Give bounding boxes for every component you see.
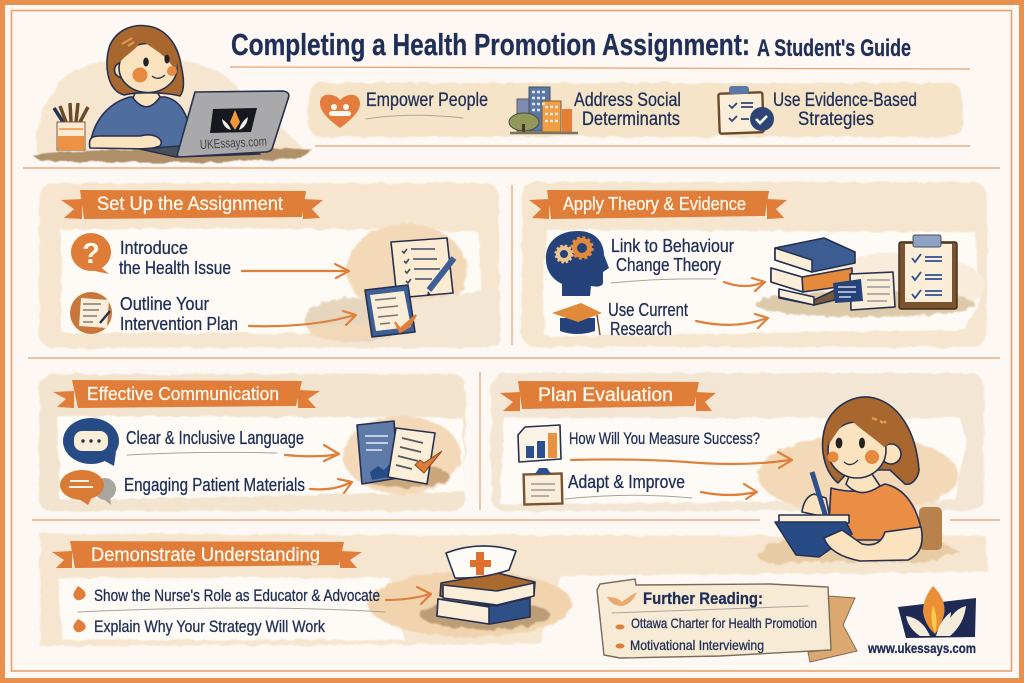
heading ribbon: Demonstrate Understanding: [91, 545, 320, 566]
illustration: student writing: [758, 397, 960, 563]
panel: key principles strip: [308, 83, 963, 137]
face: [828, 398, 901, 478]
reading list: Motivational Interviewing: [630, 637, 764, 653]
heading: Further Reading:: [643, 589, 763, 608]
arm and hand: [824, 527, 922, 561]
shirt: [828, 484, 921, 540]
arrow: [724, 278, 765, 291]
pen and hand: [802, 472, 830, 518]
text: Empower People: [366, 90, 488, 119]
arrow: [285, 445, 339, 461]
arrow: [701, 484, 757, 499]
arrow: [249, 311, 356, 326]
text: Introduce the Health Issue: the Health Issue: [119, 258, 231, 278]
text: Address Social Determinants: Determinants: [582, 109, 680, 130]
illustration: documents and check: [357, 421, 442, 484]
logo: UK Essays: www.ukessays.com: [867, 640, 976, 656]
text: Use Current Research: Research: [610, 319, 672, 339]
panel: Further Reading: [597, 579, 857, 662]
heading ribbon: Apply Theory & Evidence: [563, 194, 746, 214]
upper book: [440, 573, 535, 606]
bullet list: Show the Nurse's Role as Educator & Advocate: [94, 586, 380, 605]
text: Engaging Patient Materials: Engaging Patient Materials: [124, 475, 305, 495]
arrow: [310, 479, 352, 493]
arrow: [696, 314, 768, 328]
text: Outline Your Intervention Plan: Outline Your: [120, 294, 209, 314]
text: Use Evidence-Based Strategies: Use Evidence-Based: [773, 90, 917, 111]
illustration: books and nurse cap: [437, 546, 535, 624]
reading list: [616, 615, 817, 653]
text: Outline Your Intervention Plan: Intervention Plan: [120, 314, 238, 334]
pencil cup: [54, 103, 88, 150]
panel: Set Up the Assignment: [39, 183, 500, 348]
icon: clipboard: [524, 468, 562, 504]
icon: question bubble: [71, 233, 111, 274]
heading ribbon: [500, 381, 716, 411]
illustration: checklist, pen and clipboard: [365, 238, 454, 337]
header illustration: student at laptop: [32, 26, 312, 163]
student figure: [89, 26, 190, 149]
icon: graduation cap: [552, 303, 602, 335]
icon: bar chart: [518, 425, 561, 462]
icon: navy speech bubble: [63, 418, 119, 466]
text: Introduce the Health Issue: Introduce: [120, 238, 188, 258]
icon: question bubble: ?: [82, 238, 100, 270]
desk: [32, 148, 312, 163]
heading ribbon: [61, 190, 323, 219]
reading list: Ottawa Charter for Health Promotion: [631, 615, 817, 631]
ribbon tail: [808, 596, 857, 662]
panel: Plan Evaluation: [491, 373, 984, 515]
heading ribbon: [53, 380, 320, 408]
heading ribbon: Plan Evaluation: [538, 385, 673, 406]
arrow: [571, 452, 792, 468]
icon: heart with people: [320, 95, 360, 128]
text: Adapt & Improve: [565, 472, 692, 499]
research sheet: [850, 272, 895, 310]
lower book: [437, 598, 530, 624]
illustration backdrop: [368, 571, 572, 637]
text: Empower People: Empower People: [366, 90, 488, 111]
text: Link to Behaviour Change Theory: Change Theory: [616, 255, 721, 275]
illustration backdrop: [758, 435, 958, 515]
text: Use Current Research: Use Current: [608, 300, 688, 320]
arrow: [386, 587, 431, 604]
text: Address Social Determinants: [574, 90, 681, 130]
text: Introduce the Health Issue: [119, 238, 231, 278]
text: Address Social Determinants: Address Social: [574, 90, 681, 111]
heading ribbon: [529, 190, 787, 219]
icon: head with gears: [546, 231, 609, 296]
logo: UK Essays: [867, 586, 976, 656]
text: Link to Behaviour Change Theory: [611, 236, 734, 283]
title: Completing a Health Promotion Assignment:: [231, 27, 750, 62]
notebook: [775, 515, 852, 557]
clipboard: [899, 235, 957, 309]
laptop with logo: UKEssays.com: [200, 134, 267, 152]
bullet list: [73, 586, 385, 636]
icon: notepad circle: [70, 292, 112, 334]
text: Adapt & Improve: Adapt & Improve: [568, 472, 685, 492]
chair: [919, 507, 942, 550]
illustration backdrop: [343, 416, 461, 494]
text: Use Evidence-Based Strategies: Strategies: [798, 109, 874, 130]
icon: city buildings: [509, 87, 578, 133]
text: Use Current Research: [608, 300, 688, 339]
text: Clear & Inclusive Language: Clear & Inclusive Language: [126, 428, 304, 448]
panel: Effective Communication: [39, 374, 466, 511]
laptop with logo: [140, 91, 289, 157]
hair: [823, 397, 919, 484]
bullet list: Explain Why Your Strategy Will Work: [94, 617, 325, 636]
blue note: [833, 279, 863, 303]
text: Outline Your Intervention Plan: [120, 294, 238, 334]
icon: open book: [607, 592, 637, 606]
illustration backdrop: [755, 253, 985, 317]
text: Use Evidence-Based Strategies: [773, 90, 917, 130]
panel: Demonstrate Understanding: [40, 534, 988, 646]
icon: chat bubbles: [60, 470, 116, 505]
nurse cap: [446, 546, 516, 578]
illustration: books and clipboard: [771, 235, 957, 310]
text: How Will You Measure Success?: How Will You Measure Success?: [569, 429, 760, 448]
icon: clipboard with check: [718, 86, 774, 134]
arrow: [242, 264, 349, 278]
illustration backdrop: [304, 224, 500, 346]
title: A Student's Guide: [757, 35, 911, 62]
heading ribbon: Set Up the Assignment: [97, 194, 284, 215]
books: [771, 238, 855, 305]
panel: Apply Theory & Evidence: [522, 182, 987, 347]
text: Link to Behaviour Change Theory: Link to Behaviour: [611, 236, 734, 256]
heading ribbon: [52, 541, 362, 568]
heading ribbon: Effective Communication: [87, 384, 279, 404]
